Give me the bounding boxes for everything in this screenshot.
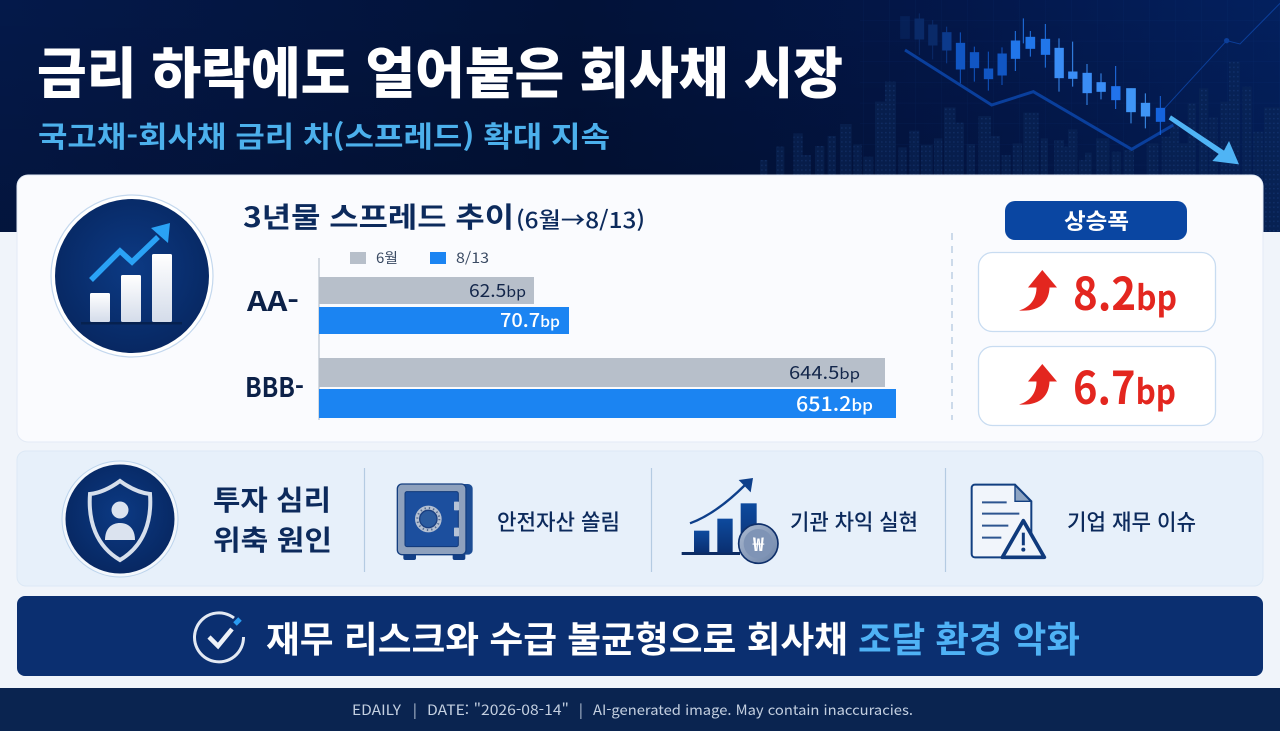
icon: rising bar chart — [51, 195, 213, 357]
legend — [350, 248, 489, 268]
bar: AA- June: 62.5bp — [469, 277, 526, 303]
heading: cause of weak sentiment — [213, 479, 332, 559]
heading: cause of weak sentiment: 위축 원인 — [213, 519, 332, 559]
icon: rising bars with won coin: ₩ — [752, 530, 765, 557]
label: corporate financial issues: 기업 재무 이슈 — [1067, 505, 1196, 537]
bar chart — [245, 258, 896, 420]
conclusion text: 재무 리스크와 수급 불균형으로 회사채 — [266, 611, 848, 663]
row label: AA-: AA- — [246, 280, 299, 319]
heading: cause of weak sentiment: 투자 심리 — [213, 479, 331, 519]
bar: BBB- June: 644.5 bp — [789, 359, 860, 385]
callout: AA- increase — [978, 252, 1216, 332]
label: institutional profit taking: 기관 차익 실현 — [790, 505, 918, 537]
footer — [0, 688, 1280, 731]
candlesticks — [901, 13, 1165, 135]
bar: BBB- August — [319, 388, 896, 418]
footer: DATE: "2026-08-14" — [427, 700, 569, 720]
footer: | — [579, 700, 583, 720]
chart heading — [243, 196, 645, 236]
icon: shield with person — [62, 461, 178, 577]
title: 금리 하락에도 얼어붙은 회사채 시장 — [37, 29, 843, 109]
bar: AA- June — [319, 277, 534, 304]
row label: BBB-: BBB- — [245, 366, 304, 405]
panel: 3-year spread trend — [17, 175, 1263, 442]
subtitle: 국고채-회사채 금리 차(스프레드) 확대 지속 — [38, 114, 610, 156]
chart heading: (6월→8/13) — [516, 203, 645, 235]
panel: conclusion banner — [17, 596, 1263, 676]
icon: rising bars with won coin — [682, 478, 778, 563]
conclusion text: 조달 환경 악화 — [858, 611, 1080, 663]
panel: causes of weak sentiment — [17, 451, 1263, 586]
increase badge — [1005, 201, 1187, 240]
decorative chart: skyline and falling candlesticks — [760, 0, 1280, 232]
legend: 6월 — [376, 248, 398, 268]
icon: safe — [397, 484, 473, 560]
footer: | — [413, 700, 417, 720]
header background — [0, 0, 1280, 232]
callout: BBB- increase: 6.7bp — [1073, 352, 1176, 417]
skyline — [760, 62, 1280, 232]
icon: check circle — [195, 613, 244, 662]
bar: BBB- August: 651.2bp — [796, 388, 873, 417]
label: flight to safe assets: 안전자산 쏠림 — [497, 505, 620, 537]
bar: AA- August: 70.7bp — [500, 306, 560, 333]
callout: BBB- increase — [978, 346, 1216, 426]
callout: AA- increase: 8.2bp — [1073, 258, 1177, 323]
icon: red arrow — [1019, 364, 1057, 405]
bar: AA- August — [319, 306, 569, 334]
down arrow — [1169, 115, 1239, 164]
thin rising line — [1160, 3, 1280, 113]
bar: BBB- June — [319, 358, 885, 387]
increase badge: 상승폭 — [1064, 204, 1129, 236]
chart heading: 3년물 스프레드 추이 — [243, 196, 514, 236]
legend: 8/13 — [456, 248, 489, 268]
footer: AI-generated image. May contain inaccuracies. — [593, 700, 913, 720]
icon: red arrow — [1019, 270, 1057, 311]
thick falling line — [905, 50, 1173, 149]
icon: document with warning — [972, 485, 1044, 557]
footer: EDAILY — [352, 700, 402, 720]
